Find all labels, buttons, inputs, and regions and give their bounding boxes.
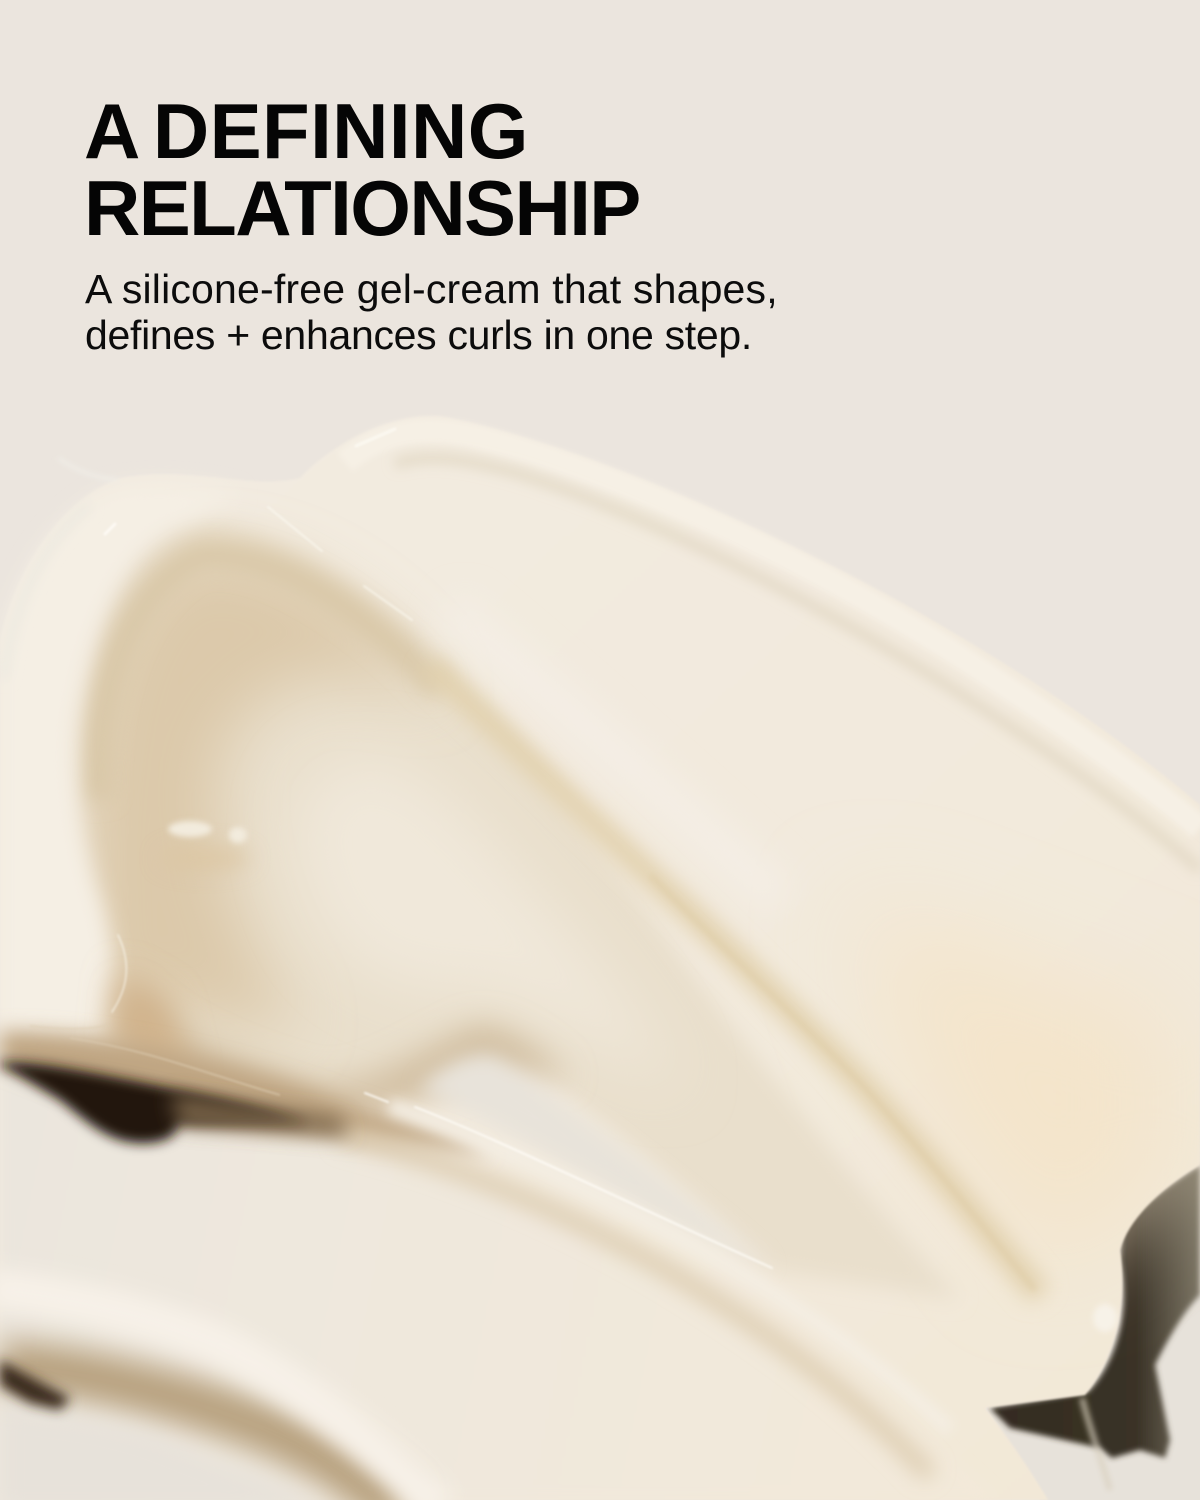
dark left shadow bbox=[0, 1062, 310, 1143]
bottom-left tan underside bbox=[0, 1365, 400, 1500]
lower cream field bbox=[0, 1065, 1000, 1500]
title: RELATIONSHIP bbox=[84, 164, 640, 252]
brown band above dark shadow bbox=[0, 1032, 490, 1155]
gel lip lines bbox=[30, 1025, 280, 1095]
title bbox=[84, 87, 640, 252]
pale groove bbox=[420, 1054, 770, 1268]
faint gel wisp bbox=[58, 458, 118, 480]
bottom-left dark accent bbox=[0, 1360, 70, 1410]
tail of shadow bbox=[170, 1095, 350, 1135]
valley shadow above lower band bbox=[120, 985, 570, 1120]
lower ridge pale top bbox=[390, 1106, 950, 1430]
bright upper rim bbox=[345, 431, 1200, 828]
bottom-left bright curl bbox=[0, 1288, 440, 1500]
gel drip over right shadow bbox=[1082, 1398, 1110, 1490]
lower ridge tan underside bbox=[340, 1135, 930, 1475]
lobe inner light area bbox=[296, 756, 680, 1090]
subtitle: A silicone-free gel-cream that shapes, bbox=[85, 266, 778, 312]
tan corner near gel lip bbox=[110, 970, 190, 1080]
shadow under upper rim bbox=[395, 458, 1200, 870]
dark shadow under right edge bbox=[990, 1165, 1200, 1458]
light band right of ridge bbox=[450, 610, 780, 900]
main cream body bbox=[0, 416, 1200, 1500]
pale surface below the right edge bbox=[985, 1290, 1200, 1500]
warm glow on right side bbox=[850, 900, 1170, 1270]
gel droplet at right edge bbox=[1093, 1304, 1117, 1332]
lobe body bbox=[88, 520, 960, 1300]
glossy highlight lines bbox=[105, 429, 772, 1268]
subtitle: defines + enhances curls in one step. bbox=[85, 312, 752, 358]
bump on cream surface bbox=[160, 846, 250, 870]
subtitle bbox=[85, 266, 778, 358]
bubbles on cream surface bbox=[168, 821, 247, 843]
left rim bbox=[0, 485, 240, 1030]
central ridge bbox=[430, 665, 1040, 1295]
bottom-left pale surface bbox=[0, 1405, 330, 1500]
title: A DEFINING bbox=[84, 87, 529, 175]
central ridge core bbox=[650, 875, 1035, 1290]
lobe beige fill bbox=[84, 555, 440, 1030]
pale outer edge of rim bbox=[4, 505, 90, 680]
lobe top shadow bbox=[97, 555, 440, 800]
